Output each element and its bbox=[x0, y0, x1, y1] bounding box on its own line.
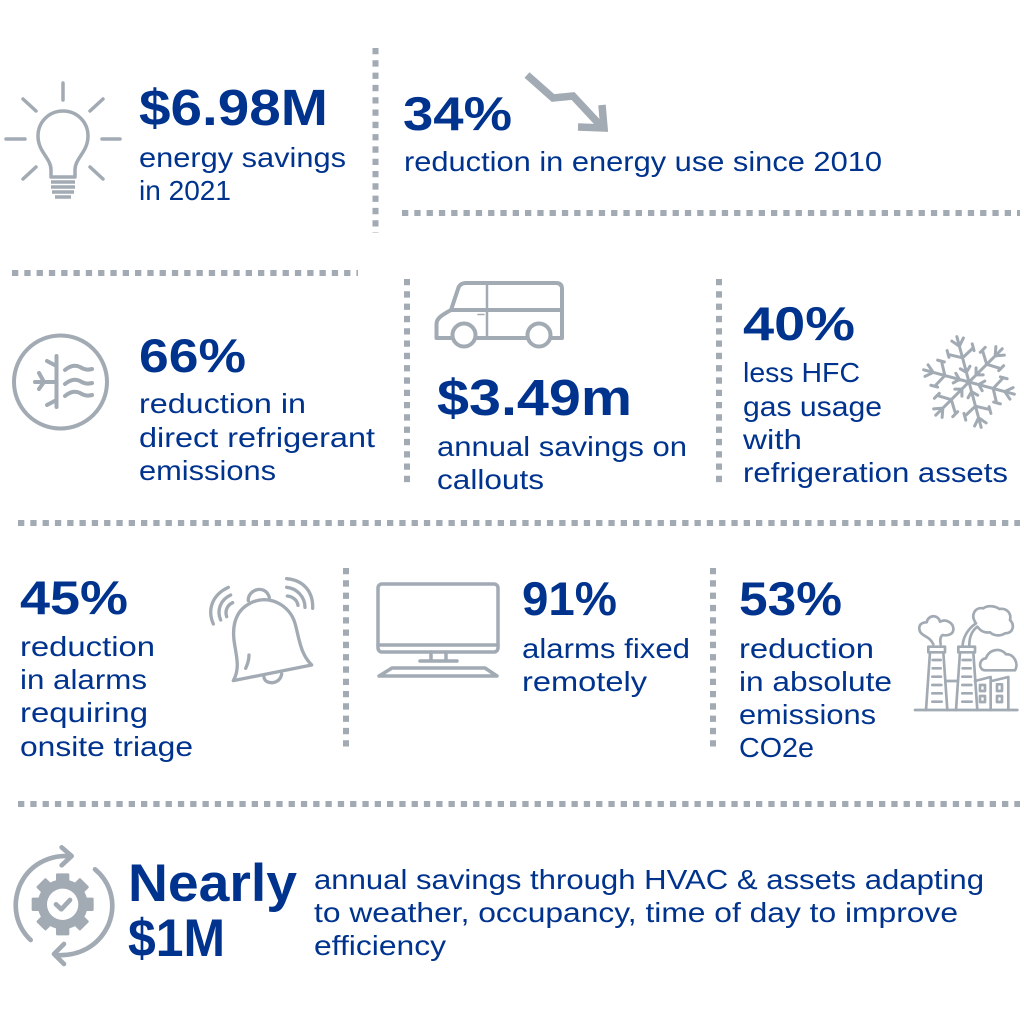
stat: energy savings bbox=[139, 79, 346, 206]
stat: alarms onsite triage: in alarms bbox=[20, 664, 147, 695]
stat: energy savings: energy savings bbox=[139, 142, 346, 173]
dotted dividers bbox=[12, 48, 1020, 804]
stat: alarms fixed remotely bbox=[522, 572, 690, 697]
stat: energy savings: $6.98M bbox=[139, 79, 328, 136]
stat: energy use reduction: 34% bbox=[403, 87, 512, 140]
icon: ringing bell bbox=[211, 579, 313, 683]
stat: callout savings: $3.49m bbox=[437, 369, 632, 426]
icon: gear with cycle arrows bbox=[16, 847, 112, 964]
stat: HFC gas usage: 40% bbox=[743, 297, 855, 350]
stat: HFC gas usage: gas usage bbox=[743, 391, 882, 422]
stat: refrigerant emissions bbox=[139, 329, 375, 486]
stat: energy use reduction: reduction in energy use since 2010 bbox=[404, 146, 882, 177]
stat: refrigerant emissions: reduction in bbox=[139, 388, 306, 419]
stat: refrigerant emissions: 66% bbox=[139, 329, 246, 382]
stat: alarms onsite triage: requiring bbox=[20, 697, 148, 728]
icon: snowflake bbox=[920, 333, 1018, 431]
stat: absolute emissions: 53% bbox=[739, 572, 842, 625]
stat: refrigerant emissions: direct refrigerant bbox=[139, 422, 375, 453]
icon: light bulb bbox=[6, 83, 120, 197]
icon: van bbox=[436, 283, 562, 346]
stat: HFC gas usage: refrigeration assets bbox=[743, 457, 1008, 488]
icon: computer monitor bbox=[378, 584, 498, 676]
stat: HVAC savings: to weather, occupancy, time of day to improve bbox=[314, 897, 958, 928]
stat: absolute emissions: CO2e bbox=[739, 732, 814, 763]
stat: absolute emissions: in absolute bbox=[739, 666, 892, 697]
stat: HFC gas usage: less HFC bbox=[743, 357, 860, 388]
icon: refrigerant circle bbox=[14, 336, 107, 428]
stat: energy use reduction bbox=[403, 87, 882, 177]
stat: alarms fixed remotely: remotely bbox=[522, 666, 647, 697]
stat: alarms onsite triage: reduction bbox=[20, 631, 155, 662]
icon: factory bbox=[915, 606, 1017, 710]
stat: absolute emissions: reduction bbox=[739, 633, 874, 664]
stat: HFC gas usage bbox=[742, 297, 1008, 488]
stat: HVAC savings: efficiency bbox=[314, 930, 446, 961]
stat: HVAC savings: $1M bbox=[128, 909, 225, 968]
stat: alarms onsite triage bbox=[20, 571, 193, 762]
stat: alarms onsite triage: 45% bbox=[20, 571, 128, 624]
stat: absolute emissions bbox=[739, 572, 892, 763]
stat: callout savings: annual savings on bbox=[437, 431, 687, 462]
stat: refrigerant emissions: emissions bbox=[139, 455, 276, 486]
stat: HVAC savings: annual savings through HVAC & assets adapting bbox=[314, 864, 984, 895]
icon: downward arrow bbox=[527, 75, 604, 128]
stat: alarms onsite triage: onsite triage bbox=[20, 731, 193, 762]
stat: alarms fixed remotely: alarms fixed bbox=[522, 633, 690, 664]
stat: HVAC savings bbox=[128, 854, 984, 968]
stat: callout savings: callouts bbox=[437, 464, 544, 495]
stat: callout savings bbox=[437, 369, 687, 495]
stat: absolute emissions: emissions bbox=[739, 699, 876, 730]
stat: alarms fixed remotely: 91% bbox=[522, 572, 617, 625]
stat: HVAC savings: Nearly bbox=[128, 854, 298, 913]
stat: HFC gas usage: with bbox=[742, 424, 802, 455]
stat: energy savings: in 2021 bbox=[139, 175, 231, 206]
